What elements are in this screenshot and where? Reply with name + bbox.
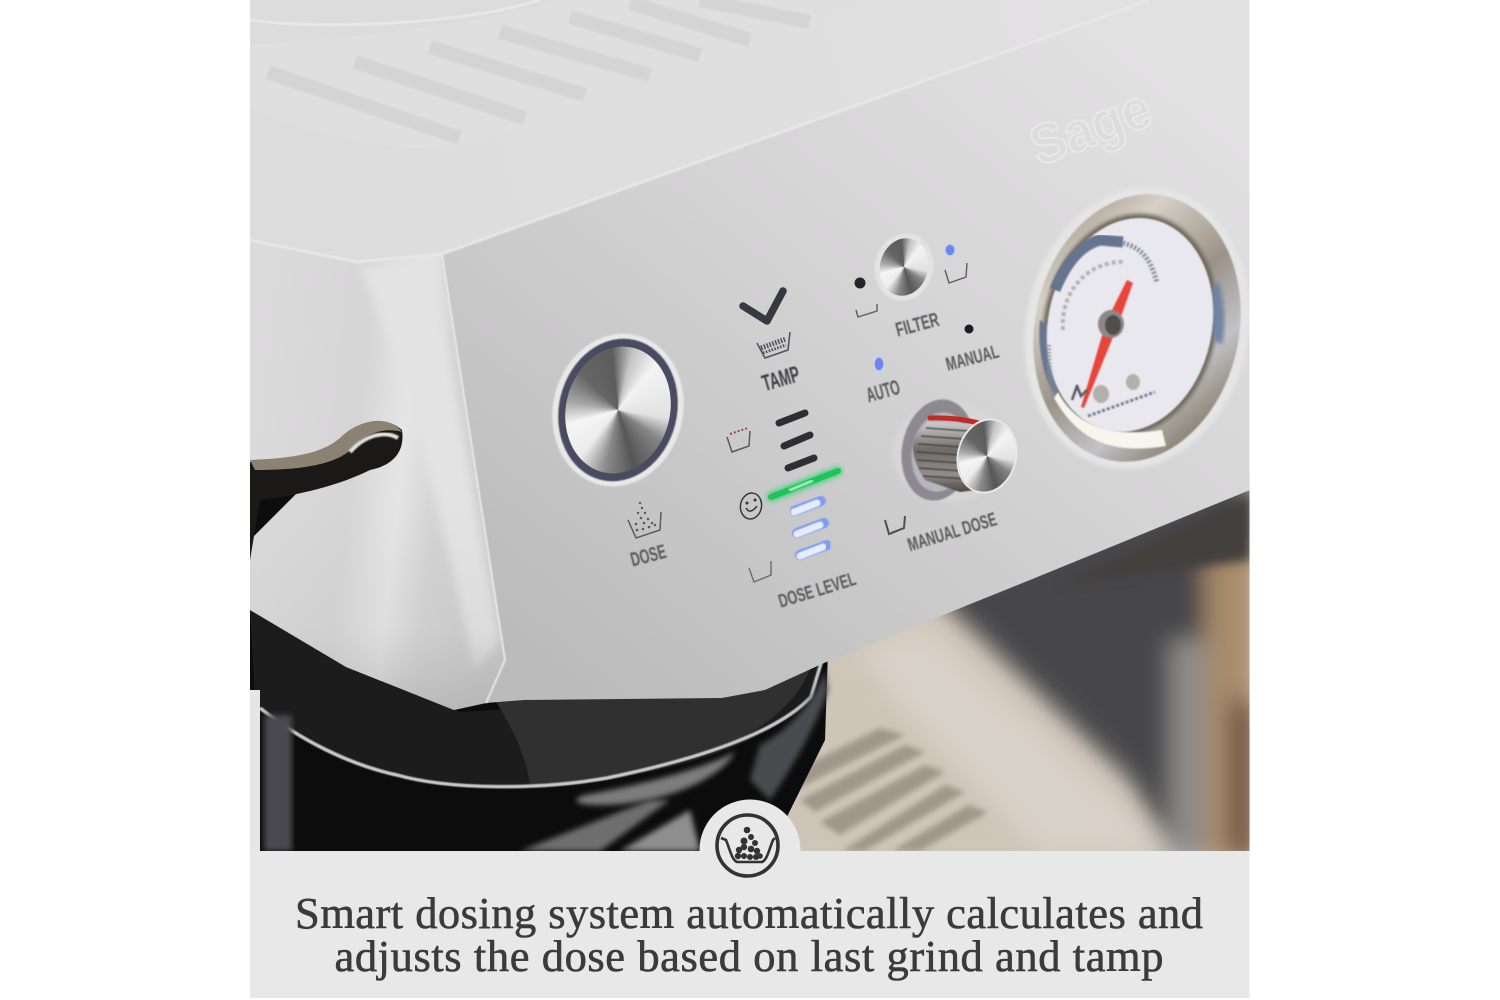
label: dose level: DOSE LEVEL bbox=[776, 569, 859, 612]
icon: dosing basket with beans bbox=[717, 815, 778, 876]
logo: embossed Sage: Sage bbox=[1021, 76, 1159, 177]
blurred background: kitchen and second machine bbox=[788, 490, 1250, 851]
group: dose button surround bbox=[552, 333, 684, 487]
label: manual dose: MANUAL DOSE bbox=[905, 509, 999, 556]
group: panel labels bbox=[628, 309, 1002, 612]
group: machine side bbox=[250, 240, 512, 710]
label: auto: AUTO bbox=[864, 376, 903, 407]
group: filter button surround bbox=[875, 234, 933, 300]
green bar bbox=[771, 471, 838, 497]
group: pressure gauge bbox=[1025, 192, 1248, 468]
icon: check mark bbox=[743, 291, 783, 321]
group: manual dose dial housing bbox=[901, 398, 982, 502]
icon: full basket bbox=[727, 428, 750, 452]
icon: filter double bbox=[945, 263, 967, 283]
blue bars bbox=[794, 501, 827, 555]
bezel highlight bbox=[1054, 392, 1166, 449]
icon: tamp basket bbox=[757, 332, 790, 358]
indicator lights bbox=[854, 278, 866, 288]
panel: brushed steel control face bbox=[442, 0, 1250, 703]
group: portafilter bbox=[250, 600, 828, 851]
icon: smiley bbox=[740, 492, 762, 520]
bezel inner dark edge bbox=[1041, 211, 1217, 433]
dark bars bbox=[779, 413, 814, 468]
icon badge backing bbox=[700, 800, 800, 900]
icon: manual dose basket bbox=[885, 516, 905, 534]
bezel reflection bbox=[1039, 320, 1058, 398]
icon: filter single bbox=[856, 304, 877, 317]
red indicator bbox=[930, 418, 979, 423]
dosing collar bbox=[250, 608, 822, 787]
gauge needle bbox=[1081, 280, 1133, 408]
caption text bbox=[295, 888, 1203, 981]
label: manual: MANUAL bbox=[944, 341, 1002, 376]
side lower shading bbox=[309, 632, 500, 710]
dose button knob bbox=[552, 335, 684, 485]
gauge scale arc bbox=[1055, 240, 1123, 290]
chrome rim bbox=[260, 660, 822, 787]
label: tamp: TAMP bbox=[759, 361, 803, 396]
caption line 1: Smart dosing system automatically calculates and bbox=[295, 888, 1203, 938]
icon: dose grounds bbox=[628, 502, 661, 538]
icon: empty basket bbox=[749, 561, 771, 582]
gauge screws bbox=[1126, 374, 1140, 390]
label: dose: DOSE bbox=[628, 541, 669, 571]
manual dose knob face bbox=[951, 414, 1023, 498]
label: filter: FILTER bbox=[893, 309, 942, 342]
group: drip tray top bbox=[250, 0, 1150, 262]
bevel highlight bbox=[360, 258, 500, 670]
filter button knob bbox=[874, 233, 934, 301]
group: steam wand bbox=[250, 420, 402, 560]
photo: espresso machine control panel bbox=[250, 0, 1250, 998]
caption band bbox=[250, 851, 1250, 998]
group: LED indicators bbox=[771, 244, 974, 556]
caption line 2: adjusts the dose based on last grind and tamp bbox=[334, 931, 1164, 981]
